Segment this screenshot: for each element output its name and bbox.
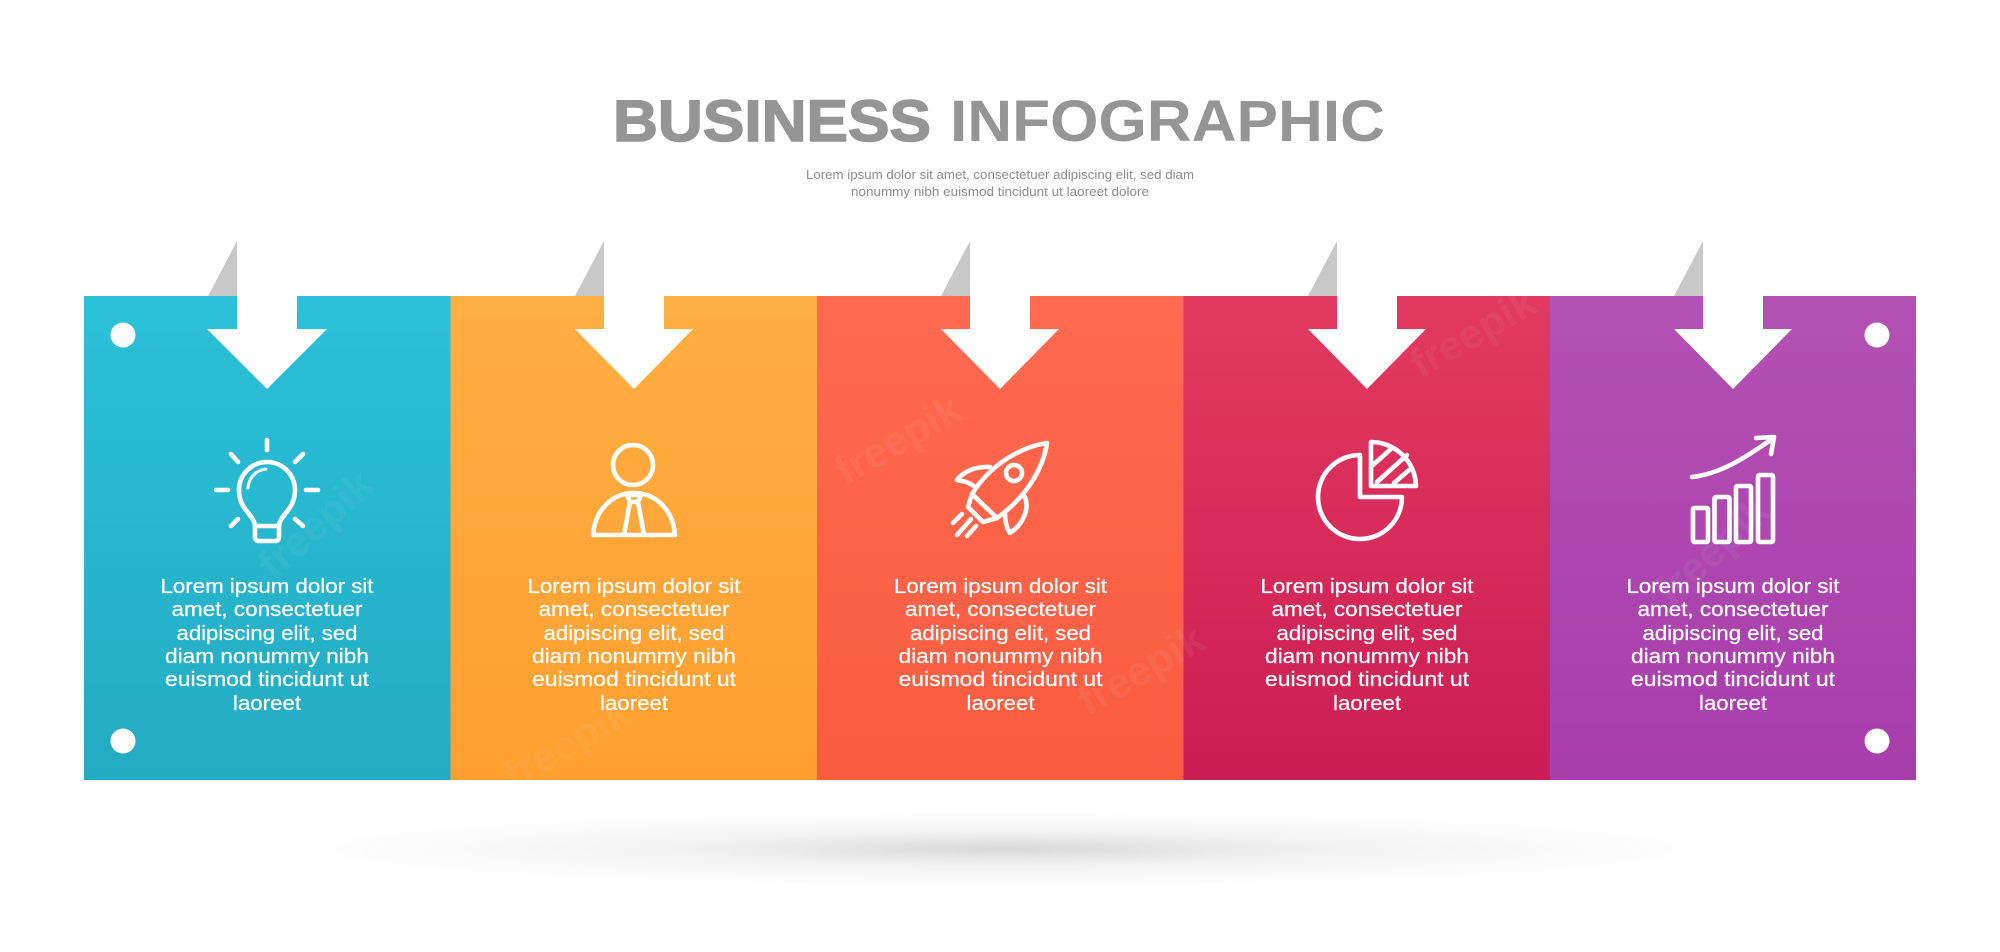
arrow — [575, 242, 693, 389]
icon: growth bar chart — [1692, 437, 1774, 542]
fold shadow — [575, 241, 604, 296]
body text: adipiscing elit, sed — [176, 622, 358, 645]
panel: step 1 teal — [84, 241, 451, 780]
body text: diam nonummy nibh — [165, 645, 369, 668]
arrow — [1674, 242, 1792, 389]
icon: business person — [593, 445, 675, 535]
panel: step 2 orange — [450, 241, 818, 780]
body text: Lorem ipsum dolor sit — [160, 575, 374, 598]
watermarks: freepik — [248, 460, 383, 588]
body text: Lorem ipsum dolor sit — [528, 575, 741, 598]
body text: Lorem ipsum dolor sit — [1260, 575, 1474, 598]
body text: Lorem ipsum dolor sit — [1626, 575, 1840, 598]
body text — [528, 575, 741, 715]
watermarks: freepik — [495, 688, 639, 798]
body text: laoreet — [1699, 692, 1767, 715]
corner dots — [110, 322, 136, 754]
watermarks: freepik — [1645, 486, 1780, 614]
body text — [1260, 575, 1474, 715]
fold shadow — [1308, 241, 1337, 296]
body text: Lorem ipsum dolor sit — [894, 575, 1107, 598]
fold shadow — [941, 241, 970, 296]
title: BUSINESS — [613, 89, 931, 154]
body text: amet, consectetuer — [1272, 598, 1463, 621]
panel: step 3 coral — [817, 241, 1184, 780]
icon: light bulb — [216, 440, 318, 541]
body text: diam nonummy nibh — [532, 645, 736, 668]
body text: adipiscing elit, sed — [1642, 622, 1824, 645]
subtitle: Lorem ipsum dolor sit amet, consectetuer adipiscing elit, sed diam — [806, 168, 1194, 182]
corner dots — [1864, 322, 1890, 754]
icon: rocket — [953, 443, 1047, 536]
body text: adipiscing elit, sed — [910, 622, 1091, 645]
panel: step 5 purple — [1550, 241, 1916, 780]
body text — [160, 575, 374, 715]
body text: euismod tincidunt ut — [165, 668, 369, 691]
subtitle — [806, 168, 1194, 199]
body text: laoreet — [966, 692, 1035, 715]
arrow — [941, 242, 1059, 389]
body text — [894, 575, 1107, 715]
watermarks: freepik — [1069, 614, 1213, 724]
body text: amet, consectetuer — [172, 598, 363, 621]
body text: euismod tincidunt ut — [1631, 668, 1835, 691]
body text: diam nonummy nibh — [1631, 645, 1835, 668]
watermarks: freepik — [826, 384, 970, 494]
icon: pie chart — [1318, 442, 1416, 539]
fold shadow — [208, 241, 237, 296]
body text: amet, consectetuer — [905, 598, 1096, 621]
body text: diam nonummy nibh — [1265, 645, 1469, 668]
body text: euismod tincidunt ut — [898, 668, 1103, 691]
body text: amet, consectetuer — [538, 598, 730, 621]
body text: adipiscing elit, sed — [544, 622, 724, 645]
body text — [1626, 575, 1840, 715]
body text: diam nonummy nibh — [898, 645, 1102, 668]
floor shadow — [285, 811, 1725, 887]
subtitle: nonummy nibh euismod tincidunt ut laoreet dolore — [851, 185, 1149, 199]
watermarks: freepik — [1401, 277, 1545, 387]
body text: laoreet — [233, 692, 301, 715]
arrow — [1308, 242, 1426, 389]
body text: euismod tincidunt ut — [1265, 668, 1469, 691]
watermarks — [248, 277, 1780, 798]
body text: amet, consectetuer — [1638, 598, 1829, 621]
fold shadow — [1674, 241, 1703, 296]
body text: adipiscing elit, sed — [1276, 622, 1458, 645]
body text: euismod tincidunt ut — [532, 668, 736, 691]
body text: laoreet — [600, 692, 668, 715]
body text: laoreet — [1333, 692, 1401, 715]
title — [613, 89, 1385, 154]
title: INFOGRAPHIC — [950, 89, 1385, 154]
panel: step 4 crimson — [1184, 241, 1550, 780]
arrow — [207, 242, 327, 389]
